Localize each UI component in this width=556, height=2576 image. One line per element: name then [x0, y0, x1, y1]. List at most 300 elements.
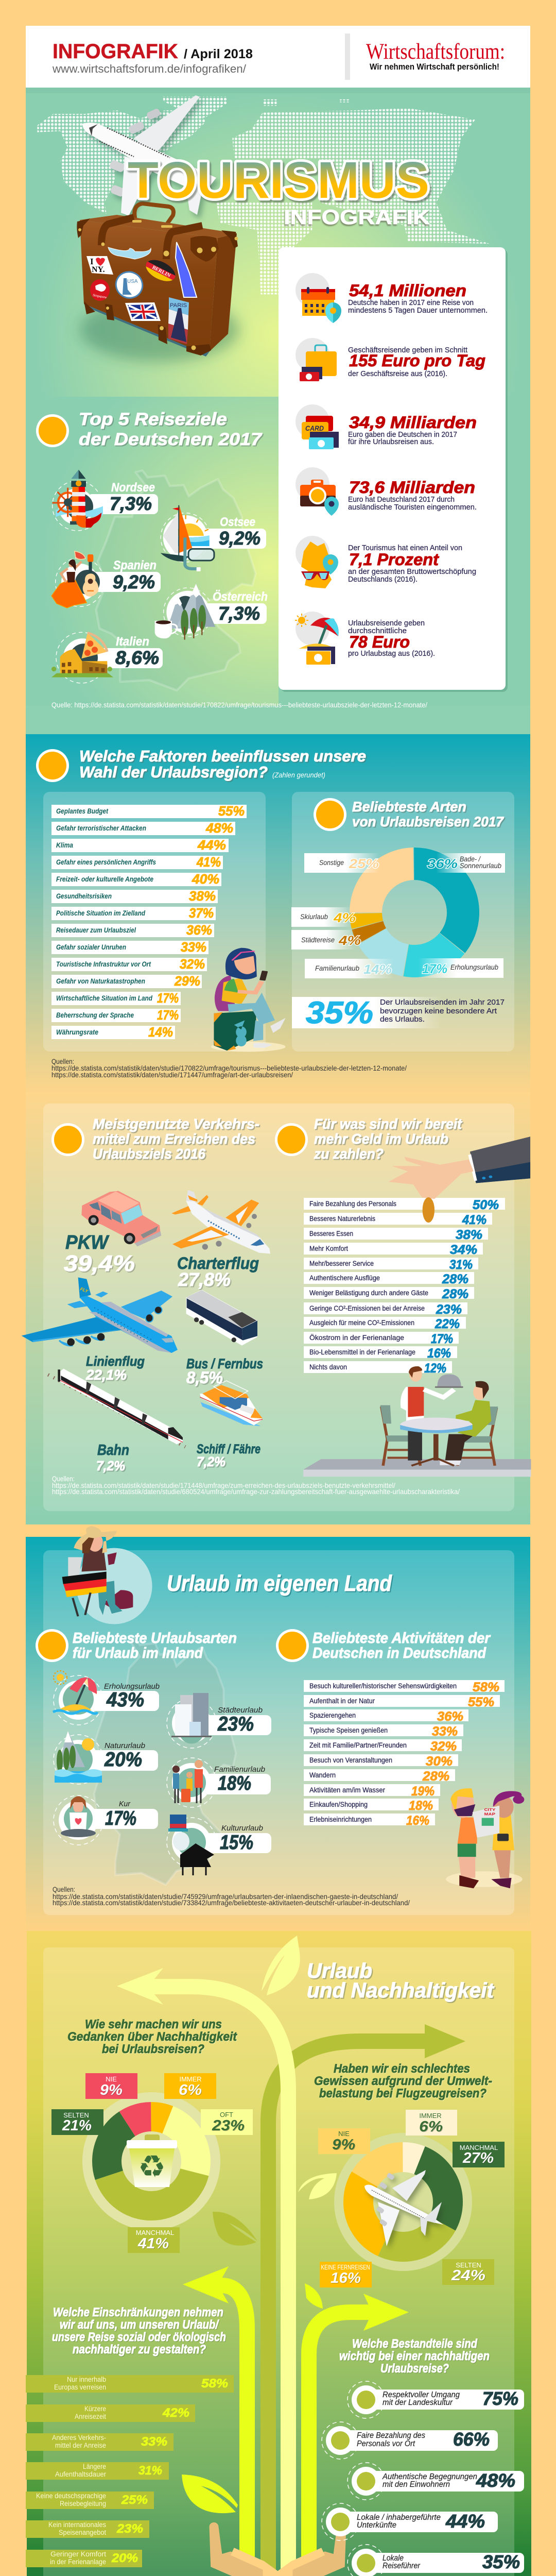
transport: train — [48, 1369, 185, 1473]
heading: Welche Faktoren beeinflussen unsere — [79, 747, 366, 765]
item: Kultururlaub: 15% — [220, 1832, 253, 1854]
bar chart: willingness to pay: Ausgleich für meine CO²-Emissionen — [309, 1318, 414, 1327]
stat: 54,1 Millionen — [296, 273, 488, 323]
panel: factors bar chart: 44% — [197, 837, 226, 853]
panel: factors bar chart: Gefahr eines persönlichen Angriffs — [56, 858, 156, 866]
label: IMMER: IMMER — [419, 2112, 442, 2120]
heading: domestic holiday types: Beliebteste Urlaubsarten — [73, 1630, 237, 1647]
bar chart: activities: Typische Speisen genießen — [309, 1726, 388, 1734]
label: IMMER: 6% — [419, 2119, 443, 2135]
bar chart: restrictions: Keine deutschsprachige — [36, 2492, 106, 2500]
icon: Germany with sunglasses — [301, 541, 338, 588]
stat: 7,1 Prozent: Der Tourismus hat einen Anteil von — [348, 544, 462, 552]
transport: train: 7,2% — [96, 1458, 125, 1473]
icon: nature — [55, 1731, 102, 1783]
bar chart: willingness to pay: Bio-Lebensmittel in der Ferienanlage — [309, 1348, 415, 1356]
bar chart: activities: Wandern — [309, 1771, 336, 1779]
heading: willingness to pay — [314, 1116, 463, 1162]
bar chart: activities: 30% — [426, 1754, 453, 1769]
bullet — [36, 1629, 68, 1662]
bar chart: restrictions: 31% — [138, 2464, 162, 2478]
bar chart: willingness to pay: 28% — [442, 1287, 468, 1301]
Germany map silhouette — [96, 470, 256, 690]
stat: 34,9 Milliarden: Euro gaben die Deutschen in 2017 — [348, 430, 457, 439]
donut chart — [366, 863, 463, 961]
panel: factors bar chart: 41% — [196, 854, 221, 870]
item: Städteurlaub — [167, 1693, 271, 1748]
panel: factors bar chart: 17% — [157, 1007, 179, 1023]
header date: / April 2018 — [184, 47, 253, 61]
arrow: pale left — [154, 1987, 288, 2576]
header bar — [26, 26, 530, 88]
callout: 35%: bevorzugen keine besondere Art — [380, 1007, 497, 1015]
bar chart: willingness to pay: Geringe CO²-Emissionen bei der Anreise — [309, 1304, 425, 1312]
label: OFT — [201, 2109, 253, 2135]
icon: blue plane — [22, 1277, 178, 1353]
item: Lokale Unterkünfte: Lokale / inhabergeführte — [357, 2513, 441, 2522]
bar chart: willingness to pay: Ökostrom in der Ferienanlage — [309, 1333, 404, 1342]
question 4 heading: Welche Bestandteile sind — [352, 2337, 478, 2351]
panel: holiday types donut — [291, 792, 514, 1052]
label: Sonstige: Sonstige — [319, 858, 344, 867]
label: NIE: 9% — [332, 2137, 355, 2153]
stat: 155 Euro pro Tag: der Geschäftsreise aus (2016). — [348, 369, 447, 378]
panel: factors bar chart: Politische Situation im Zielland — [56, 909, 145, 917]
stat: 78 Euro: pro Urlaubstag aus (2016). — [348, 649, 435, 658]
arrow: olive right — [268, 2041, 430, 2576]
illustration: couple with map: MAP — [484, 1812, 495, 1816]
bar chart: activities: Zeit mit Familie/Partner/Freunden — [309, 1741, 407, 1749]
bar chart: willingness to pay: Faire Bezahlung des Personals — [309, 1199, 396, 1208]
bar chart: restrictions: in der Ferienanlage — [50, 2558, 106, 2566]
question 2 heading — [314, 2062, 492, 2100]
icon: colosseum and pizza — [51, 632, 113, 683]
item: Faire Bezahlung: 66% — [453, 2429, 490, 2450]
sticker: Berlin — [143, 256, 179, 285]
sticker: USA: USA — [127, 279, 138, 284]
bar chart: willingness to pay: Nichts davon — [309, 1363, 347, 1371]
heading: transport: Urlaubsziels 2016 — [93, 1146, 205, 1162]
question 1 heading: Gedanken über Nachhaltigkeit — [67, 2030, 237, 2044]
item: Städteurlaub: 23% — [217, 1713, 254, 1735]
heading: Wahl der Urlaubsregion? — [79, 763, 268, 781]
heading: Urlaub — [307, 1959, 372, 1982]
bar chart: restrictions — [26, 2375, 234, 2567]
stat: 7,1 Prozent: Deutschlands (2016). — [348, 575, 418, 584]
panel: factors bar chart: 40% — [192, 871, 219, 887]
heading: willingness to pay: Für was sind wir bereit — [314, 1116, 463, 1132]
sources — [51, 1057, 407, 1079]
heading: willingness to pay: zu zahlen? — [314, 1146, 384, 1162]
icon: bus — [186, 1290, 257, 1346]
label: KEINE FERNREISEN — [320, 2262, 372, 2287]
bar chart: restrictions: Kein internationales — [48, 2521, 106, 2529]
panel: factors bar chart: 29% — [174, 973, 200, 989]
illustration: hands — [209, 2522, 346, 2576]
bar chart: activities: 32% — [430, 1739, 457, 1754]
header divider — [345, 33, 350, 80]
callout: 35% — [292, 995, 505, 1030]
source: Quelle: https://de.statista.com/statistik/daten/studie/170822/umfrage/tourismus---beliebteste-urlaubsziele-der-letzten-12-monate/ — [51, 701, 427, 709]
bar chart: willingness to pay: 34% — [450, 1243, 477, 1257]
question 4 heading — [339, 2337, 490, 2376]
item: Authentische Begegnungen: 48% — [476, 2470, 515, 2491]
item: Lokale Unterkünfte: 44% — [445, 2511, 485, 2532]
label: NIE — [85, 2073, 137, 2099]
destination: Ostsee — [161, 505, 266, 571]
bar chart: willingness to pay: 17% — [431, 1332, 453, 1346]
label: NIE: NIE — [106, 2075, 117, 2083]
label: Erholungsurlaub: 17% — [422, 962, 447, 976]
stat: 73,6 Milliarden: 73,6 Milliarden — [349, 478, 475, 497]
bar chart: willingness to pay: Mehr Komfort — [309, 1244, 348, 1252]
label: Bade- / Sonnenurlaub — [427, 853, 505, 873]
item: Erholungsurlaub: Erholungsurlaub — [104, 1682, 160, 1691]
transport: charter flight: 27,8% — [178, 1269, 231, 1290]
destination: Italien: Italien — [116, 635, 149, 649]
label: NIE: NIE — [338, 2130, 350, 2138]
arrowhead: bright left — [183, 2266, 229, 2303]
label: KEINE FERNREISEN: KEINE FERNREISEN — [321, 2263, 370, 2271]
stat: 7,1 Prozent: an der gesamten Bruttowertschöpfung — [348, 567, 476, 576]
header title: INFOGRAFIK — [53, 40, 178, 63]
item: Natururlaub: Natururlaub — [105, 1741, 145, 1750]
bar chart: restrictions: Längere — [83, 2463, 106, 2470]
sources: Quellen: — [52, 1475, 75, 1483]
transport: bus — [186, 1290, 263, 1387]
item: Faire Bezahlung: Personals vor Ort — [357, 2439, 415, 2448]
bar chart: activities: 18% — [409, 1799, 433, 1813]
sticker: Paris — [168, 297, 189, 344]
sources: https://de.statista.com/statistik/daten/studie/170822/umfrage/tourismus---beliebteste-urlaubsziele-der-letzten-12-monate/ — [51, 1064, 407, 1072]
panel: factors bar chart: Gefahr von Naturkatastrophen — [56, 977, 145, 985]
label: SELTEN: 24% — [451, 2267, 485, 2284]
bar chart: restrictions: Speisenangebot — [59, 2529, 106, 2536]
item: Respektvoller Umgang: mit der Landeskultur — [383, 2398, 453, 2407]
destination: Spanien — [51, 551, 161, 608]
bar chart: restrictions: Kürzere — [84, 2405, 106, 2413]
stat: 78 Euro: 78 Euro — [349, 633, 410, 651]
item: Lokale Reiseführer: Lokale — [383, 2554, 404, 2563]
panel: factors bar chart: Freizeit- oder kulturelle Angebote — [56, 875, 153, 883]
item: Natururlaub — [54, 1731, 158, 1784]
bar chart: willingness to pay: 12% — [424, 1361, 446, 1376]
bar chart: activities: 28% — [422, 1769, 449, 1784]
question 2 heading: Haben wir ein schlechtes — [334, 2062, 470, 2076]
sticker: I love NY — [86, 256, 113, 275]
sources — [52, 1475, 460, 1496]
item: Familienurlaub: 18% — [218, 1772, 251, 1794]
label: IMMER: IMMER — [179, 2075, 202, 2083]
arrowhead: olive right — [425, 2024, 465, 2058]
label: SELTEN — [51, 2109, 103, 2135]
stat: 34,9 Milliarden — [296, 404, 477, 449]
bar chart: willingness to pay: Mehr/besserer Service — [309, 1259, 374, 1267]
stat: 34,9 Milliarden: für ihre Urlaubsreisen aus. — [348, 437, 434, 446]
panel: factors bar chart: Reisedauer zum Urlaubsziel — [56, 926, 136, 934]
label: MANCHMAL: MANCHMAL — [460, 2144, 498, 2151]
bar chart: willingness to pay: 23% — [436, 1302, 462, 1317]
label: Familienurlaub: 14% — [363, 962, 392, 977]
label: MANCHMAL: 27% — [462, 2150, 494, 2166]
label: KEINE FERNREISEN: 16% — [331, 2270, 361, 2286]
item: Kur: Kur — [119, 1800, 131, 1808]
item: Lokale Unterkünfte — [322, 2503, 498, 2540]
item: Lokale Unterkünfte: Unterkünfte — [357, 2521, 396, 2530]
transport: bus: Bus / Fernbus — [186, 1356, 263, 1371]
transport: car — [64, 1191, 161, 1276]
transport: train: Bahn — [97, 1442, 129, 1459]
heading: domestic holiday types: für Urlaub im Inland — [73, 1645, 203, 1662]
destination: Nordsee: Nordsee — [111, 481, 155, 495]
bar chart: willingness to pay: Besseres Essen — [309, 1229, 353, 1238]
item: Kultururlaub: Kultururlaub — [221, 1824, 263, 1833]
bar chart: restrictions: mittel der Anreise — [55, 2442, 106, 2449]
bar chart: activities: Aktivitäten am/im Wasser — [309, 1786, 385, 1794]
destination: Italien: 8,6% — [115, 647, 159, 668]
item: Kur — [54, 1795, 158, 1845]
question 4 heading: Urlaubsreise? — [380, 2362, 449, 2376]
transport: scheduled flight: Linienflug — [86, 1353, 145, 1369]
bar chart: willingness to pay: 38% — [456, 1228, 482, 1242]
arrow: bright right — [309, 2312, 371, 2558]
icon: camera — [300, 480, 339, 516]
sticker: Paris: PARIS — [170, 302, 187, 309]
bullet — [276, 1629, 309, 1662]
panel: factors bar chart: 32% — [180, 956, 205, 972]
question 2 heading: belastung bei Flugzeugreisen? — [319, 2087, 486, 2100]
bar chart: restrictions: Nur innerhalb — [67, 2376, 106, 2383]
heading: und Nachhaltigkeit — [307, 1978, 495, 2002]
bar chart: willingness to pay: 22% — [435, 1317, 460, 1331]
sources: https://de.statista.com/statistik/daten/studie/733842/umfrage/beliebteste-aktivitaeten-deutscher-urlauber-in-deutschland/ — [53, 1899, 410, 1907]
question 3 heading — [52, 2306, 226, 2357]
item: Respektvoller Umgang — [348, 2381, 524, 2418]
label: Erholungsurlaub: Erholungsurlaub — [450, 963, 498, 971]
item: Natururlaub: 20% — [104, 1749, 142, 1771]
suitcase — [77, 204, 239, 362]
sticker: Berlin: BERLIN — [151, 265, 172, 279]
arrowhead: bright right — [363, 2294, 409, 2331]
icon: theatre and piano — [168, 1815, 214, 1875]
item: Faire Bezahlung: Faire Bezahlung des — [357, 2431, 425, 2440]
label: Skiurlaub: 4% — [333, 911, 356, 925]
heading: Beliebteste Arten — [352, 799, 466, 815]
label: OFT: 23% — [212, 2117, 245, 2134]
icon: airplane — [364, 2170, 443, 2246]
icon: flamenco dancer and guitar — [51, 551, 104, 608]
bar chart: restrictions: 42% — [162, 2406, 189, 2420]
bar chart: activities: 58% — [473, 1680, 499, 1694]
pie chart: thoughts on sustainability — [82, 2092, 220, 2230]
sources: https://de.statista.com/statistik/daten/studie/745929/umfrage/urlaubsarten-der-inlaendischen-gaeste-in-deutschland/ — [53, 1892, 398, 1901]
item: Authentische Begegnungen — [348, 2463, 524, 2500]
bar chart: willingness to pay: 41% — [462, 1213, 486, 1227]
heading: transport — [93, 1116, 259, 1162]
panel: top 5 destinations — [36, 410, 268, 690]
label: IMMER: 6% — [179, 2082, 202, 2098]
arrowhead: pale left — [117, 1968, 163, 2005]
bar chart: willingness to pay: Weniger Belästigung durch andere Gäste — [309, 1289, 428, 1297]
icon: recycling bin: ♻ — [138, 2149, 166, 2185]
panel: factors section — [26, 734, 530, 1092]
icon: beach and money — [295, 614, 339, 665]
label: SELTEN: SELTEN — [63, 2111, 89, 2119]
question 4 heading: wichtig bei einer nachhaltigen — [339, 2349, 490, 2363]
stat: 73,6 Milliarden: Euro hat Deutschland 2017 durch — [348, 495, 455, 504]
panel: factors bar chart: Währungsrate — [56, 1028, 98, 1036]
item: Familienurlaub: Familienurlaub — [214, 1765, 265, 1774]
bar chart: willingness to pay — [304, 1198, 505, 1376]
panel: transport and willingness to pay — [22, 1092, 531, 1524]
bar chart: activities — [304, 1680, 505, 1828]
bar chart: restrictions: 20% — [111, 2551, 138, 2565]
heading — [79, 410, 263, 449]
item: Authentische Begegnungen: mit den Einwohnern — [383, 2480, 450, 2489]
panel: factors bar chart: 37% — [189, 905, 214, 921]
question 2 heading: Gewissen aufgrund der Umwelt- — [314, 2074, 492, 2088]
illustration: couple with map — [446, 1788, 524, 1888]
bar chart: restrictions: Anderes Verkehrs- — [52, 2434, 106, 2442]
label: Familienurlaub: Familienurlaub — [315, 964, 359, 972]
bar chart: restrictions: Europas verreisen — [54, 2383, 106, 2391]
transport: charter flight — [171, 1190, 270, 1290]
logo: Wirtschaftsforum: — [366, 40, 505, 64]
stat: 34,9 Milliarden: 34,9 Milliarden — [349, 413, 477, 432]
item: Authentische Begegnungen: Authentische Begegnungen — [382, 2472, 477, 2481]
destination: Österreich: Österreich — [213, 590, 268, 604]
icon: card and cash: CARD — [305, 424, 324, 432]
bar chart: activities: Einkaufen/Shopping — [309, 1800, 368, 1808]
logo: Wir nehmen Wirtschaft persönlich! — [370, 62, 499, 72]
bar chart: restrictions: Aufenthaltsdauer — [55, 2470, 106, 2478]
sticker: I love NY: I — [90, 257, 94, 266]
destination: Nordsee: 7,3% — [110, 493, 152, 514]
illustration: woman on suitcase — [211, 948, 286, 1052]
label: SELTEN — [442, 2259, 494, 2285]
stat: 78 Euro: Urlaubsreisende geben — [348, 619, 425, 628]
bar chart: willingness to pay: Besseres Naturerlebnis — [309, 1214, 375, 1223]
panel: factors bar chart: 48% — [205, 820, 233, 836]
item: Lokale Reiseführer — [348, 2545, 524, 2576]
bullet — [275, 1123, 308, 1156]
item: Kur: 17% — [105, 1807, 136, 1829]
label: Familienurlaub — [305, 959, 394, 978]
callout: 35%: 35% — [306, 995, 373, 1030]
airplane — [82, 95, 216, 216]
item: Städteurlaub: Städteurlaub — [218, 1706, 263, 1715]
panel: factors bar chart: 14% — [148, 1024, 173, 1040]
item: Familienurlaub — [167, 1758, 271, 1807]
bar chart: activities: Erlebniseinrichtungen — [309, 1815, 372, 1823]
heading: transport: mittel zum Erreichen des — [93, 1131, 255, 1147]
pie chart: bad conscience — [334, 2133, 472, 2271]
panel: factors bar chart: 38% — [189, 888, 216, 904]
transport: car: PKW — [65, 1232, 110, 1253]
transport: scheduled flight — [22, 1277, 178, 1383]
destination: Österreich — [155, 584, 268, 640]
stat: 7,1 Prozent — [296, 536, 476, 588]
sticker: wings — [108, 247, 151, 259]
bar chart: restrictions: Reisebegleitung — [60, 2500, 106, 2507]
sticker: Singapore: Singapore — [93, 294, 107, 299]
question 3 heading: nachhaltiger zu gestalten? — [73, 2343, 206, 2357]
icon: card and cash — [302, 416, 339, 449]
destination: Österreich: 7,3% — [218, 603, 260, 624]
item: Respektvoller Umgang: Respektvoller Umgang — [383, 2391, 460, 2399]
panel: key figures card — [279, 247, 508, 692]
label: Skiurlaub: Skiurlaub — [300, 912, 328, 921]
label: OFT: OFT — [220, 2111, 233, 2119]
transport: ship: 7,2% — [197, 1454, 225, 1469]
bullet — [314, 798, 346, 831]
question 3 heading: Welche Einschränkungen nehmen — [53, 2306, 223, 2319]
stat: 54,1 Millionen: Deutsche haben in 2017 eine Reise von — [348, 298, 474, 307]
label: IMMER — [406, 2110, 457, 2136]
label: Städtereise: Städtereise — [301, 936, 335, 944]
bar chart: activities: Spazierengehen — [309, 1711, 356, 1719]
panel: factors bar chart: Touristische Infrastruktur vor Ort — [56, 960, 151, 968]
destination: Spanien: 9,2% — [113, 571, 155, 592]
sources: Quellen: — [53, 1885, 75, 1893]
label: Bade- / Sonnenurlaub: 36% — [427, 857, 458, 871]
question 1 heading: bei Urlaubsreisen? — [102, 2042, 204, 2056]
question 3 heading: unsere Reise sozial oder ökologisch — [52, 2330, 226, 2344]
transport: car: 39,4% — [64, 1251, 135, 1276]
panel: factors bar chart: Geplantes Budget — [56, 807, 109, 815]
label: Städtereise — [291, 930, 361, 950]
bar chart: activities: Besuch von Veranstaltungen — [309, 1756, 392, 1764]
icon: meditation — [61, 1796, 96, 1837]
bar chart: restrictions: 25% — [121, 2493, 148, 2507]
bar chart: activities: Besuch kultureller/historischer Sehenswürdigkeiten — [309, 1682, 457, 1690]
label: SELTEN: SELTEN — [456, 2261, 481, 2269]
label: MANCHMAL — [128, 2227, 180, 2253]
bullet — [36, 414, 69, 447]
heading: transport: Meistgenutzte Verkehrs- — [93, 1116, 259, 1132]
bar chart: willingness to pay: 31% — [449, 1258, 473, 1272]
bar chart: restrictions: 33% — [141, 2435, 167, 2449]
dotted world map — [37, 97, 489, 295]
label: MANCHMAL: MANCHMAL — [136, 2229, 174, 2236]
icon: car — [81, 1191, 161, 1246]
stat: 155 Euro pro Tag — [296, 338, 485, 381]
panel: factors bar chart: Beherrschung der Sprache — [56, 1011, 134, 1019]
label: SELTEN: 21% — [62, 2117, 92, 2134]
destination: Ostsee: 9,2% — [219, 528, 260, 549]
label: Bade- / Sonnenurlaub: Bade- / — [460, 855, 481, 863]
bar chart: restrictions: Geringer Komfort — [50, 2550, 106, 2558]
icon: city — [171, 1693, 212, 1743]
bullet — [51, 1123, 84, 1156]
stat: 155 Euro pro Tag: Geschäftsreisende geben im Schnitt — [348, 346, 468, 354]
item: Lokale Reiseführer: 35% — [482, 2551, 520, 2572]
sources: Quellen: — [51, 1057, 74, 1065]
panel: factors bar chart: Gefahr sozialer Unruhen — [56, 943, 126, 951]
stat: 7,1 Prozent: 7,1 Prozent — [349, 550, 439, 569]
bar chart: willingness to pay: Authentischere Ausflüge — [309, 1274, 380, 1282]
item: Kultururlaub — [167, 1815, 271, 1875]
panel: holiday in own country — [26, 1526, 530, 1931]
leaves — [182, 1936, 337, 2513]
heading: Top 5 Reiseziele — [79, 410, 227, 429]
transport: scheduled flight: 22,1% — [85, 1367, 127, 1383]
icon: recycling bin — [127, 2134, 177, 2187]
callout: 35%: Der Urlaubsreisenden im Jahr 2017 — [380, 998, 505, 1007]
label: Erholungsurlaub — [419, 958, 503, 978]
panel: factors bar chart — [43, 792, 266, 1052]
panel: hero — [26, 88, 530, 734]
